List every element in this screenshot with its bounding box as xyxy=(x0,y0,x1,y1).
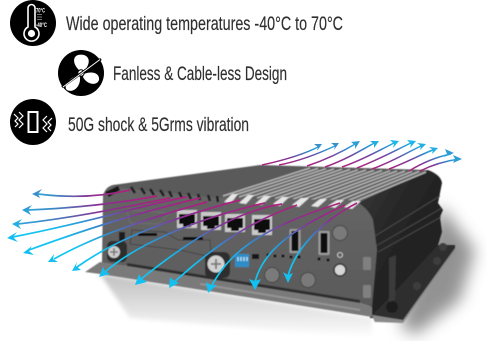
icon: fanless xyxy=(58,50,104,96)
dark vent slots xyxy=(131,187,218,202)
LED indicators xyxy=(266,254,330,262)
DIP switch xyxy=(235,254,249,267)
side latches xyxy=(363,257,371,298)
toggle switch xyxy=(252,254,259,259)
front slot row xyxy=(131,187,361,209)
device right side xyxy=(355,170,443,318)
icon: thermometer: 70°C xyxy=(36,8,45,14)
small switch xyxy=(119,232,125,241)
arrowheads: left and front xyxy=(7,189,293,293)
heatsink fins xyxy=(223,168,426,201)
mounting flange xyxy=(372,243,455,323)
SIM slots xyxy=(130,230,211,257)
icon: thermometer xyxy=(10,0,56,46)
icon: thermometer: -40°C xyxy=(36,23,47,29)
heading: shock: 50G shock & 5Grms vibration xyxy=(68,114,249,136)
serial port cover xyxy=(127,210,170,224)
device reflection xyxy=(100,274,372,338)
device: rugged fanless computer xyxy=(85,165,455,323)
front panel xyxy=(102,187,377,307)
icon: shock and vibration xyxy=(10,99,56,145)
USB ports xyxy=(290,229,330,255)
LAN ports xyxy=(177,210,272,235)
screws xyxy=(107,241,230,278)
heatsink side grooves xyxy=(375,196,442,252)
device shadow xyxy=(400,205,475,335)
power button xyxy=(334,252,346,276)
heading: fanless: Fanless & Cable-less Design xyxy=(113,63,287,85)
airflow arrows: left and front xyxy=(13,190,357,287)
antenna knobs xyxy=(264,226,348,288)
bright vent slots xyxy=(224,194,361,209)
device top surface xyxy=(103,165,428,203)
airflow arrows: right xyxy=(262,142,459,171)
heading: temperature: Wide operating temperatures -40°C to 70°C xyxy=(66,13,343,35)
arrowheads: right xyxy=(314,140,462,163)
side brackets xyxy=(389,255,396,302)
base ledge xyxy=(85,262,372,317)
